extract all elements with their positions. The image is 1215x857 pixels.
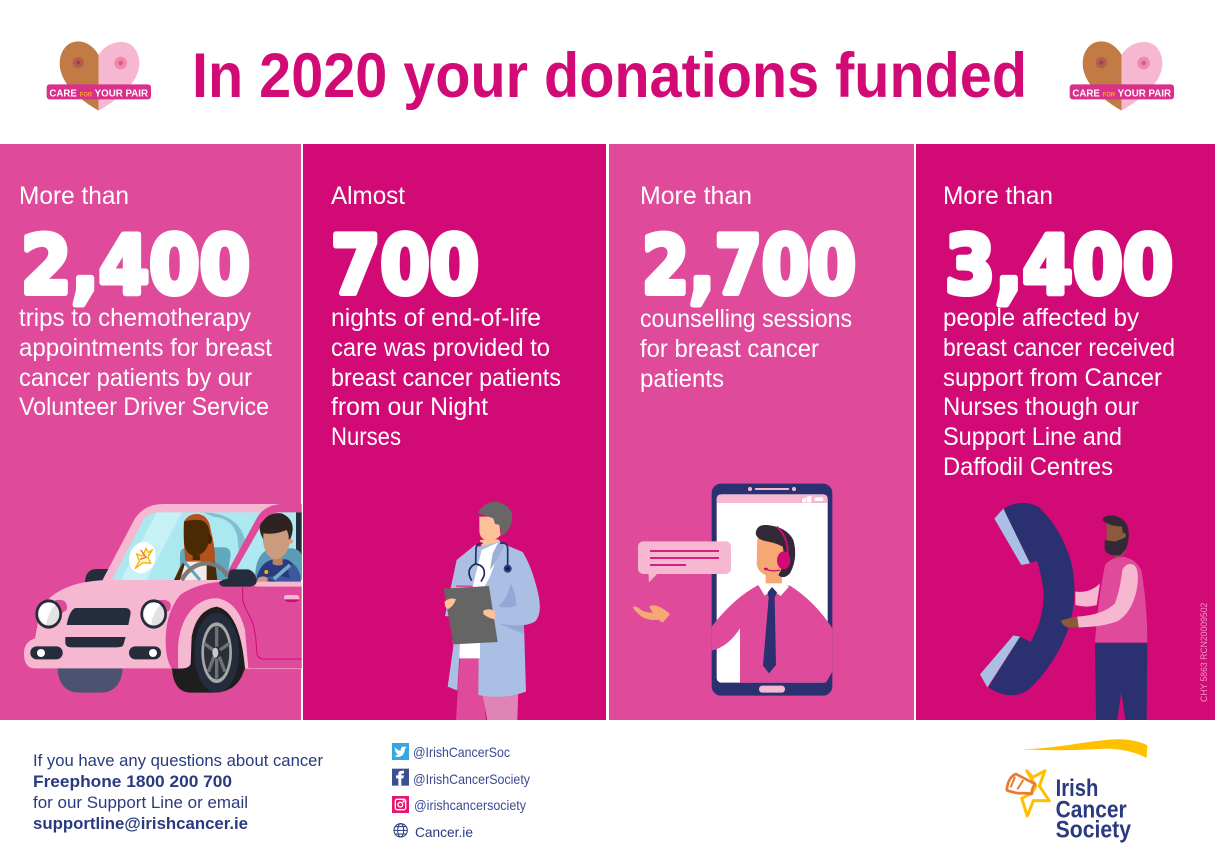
description: people affected by <box>943 304 1139 332</box>
description: Nurses though our <box>943 393 1139 421</box>
instagram handle: @irishcancersociety <box>414 797 526 813</box>
panel background <box>609 144 914 720</box>
description: trips to chemotherapy <box>19 304 251 332</box>
footer: social links <box>392 743 530 840</box>
logo: care for your pair right <box>1070 41 1174 111</box>
big number: 2,700 <box>642 219 856 312</box>
description: Support Line and <box>943 423 1122 451</box>
wordmark <box>1056 775 1132 843</box>
wordmark: Society <box>1056 816 1132 843</box>
panel background <box>303 144 606 720</box>
footer: contact text: If you have any questions about cancer <box>33 751 323 770</box>
illustration: man holding giant phone handset <box>980 503 1209 720</box>
footer: contact text: Freephone 1800 200 700 <box>33 772 232 791</box>
intro text: Almost <box>331 182 405 210</box>
description: cancer patients by our <box>19 364 252 392</box>
title: In 2020 your donations funded <box>192 41 1027 111</box>
logo: care for your pair right: CARE FOR YOUR PAIR <box>1072 88 1171 99</box>
logo: irish cancer society <box>1007 739 1147 843</box>
illustration: pink car with driver <box>24 504 302 693</box>
big number: 700 <box>331 219 479 312</box>
logo: care for your pair left <box>47 41 151 111</box>
description: breast cancer received <box>943 334 1175 362</box>
panel: night nurses <box>303 144 606 720</box>
description <box>640 305 852 393</box>
description: breast cancer patients <box>331 364 561 392</box>
reference code: CHY 5863 RCN20009502 <box>1199 603 1209 702</box>
description: patients <box>640 365 724 393</box>
description <box>331 304 561 451</box>
swoosh <box>1022 739 1147 758</box>
description: support from Cancer <box>943 364 1162 392</box>
twitter handle: @IrishCancerSoc <box>413 744 510 760</box>
description: Daffodil Centres <box>943 453 1113 481</box>
icon: facebook <box>392 769 409 786</box>
description: Nurses <box>331 423 401 451</box>
description: for breast cancer <box>640 335 819 363</box>
panel: support line and daffodil centres <box>916 144 1215 720</box>
logo: care for your pair left: CARE FOR YOUR PAIR <box>49 88 148 99</box>
icon: instagram <box>392 796 409 813</box>
intro text: More than <box>640 182 752 210</box>
footer: contact text: supportline@irishcancer.ie <box>33 814 248 833</box>
panel background <box>916 144 1215 720</box>
illustration: nurse with clipboard <box>444 502 540 720</box>
website: Cancer.ie <box>415 824 473 840</box>
description: care was provided to <box>331 334 550 362</box>
panel: volunteer driver trips <box>0 144 302 720</box>
footer: contact text <box>33 751 323 833</box>
icon: twitter <box>392 743 409 760</box>
intro text: More than <box>943 182 1053 210</box>
daffodil <box>1007 771 1049 816</box>
intro text: More than <box>19 182 129 210</box>
description: from our Night <box>331 393 488 421</box>
panel: counselling sessions <box>609 144 914 720</box>
big number: 2,400 <box>21 219 250 312</box>
footer: contact text: for our Support Line or email <box>33 793 248 812</box>
description: nights of end-of-life <box>331 304 541 332</box>
big number: 3,400 <box>945 219 1173 312</box>
description: counselling sessions <box>640 305 852 333</box>
description: appointments for breast <box>19 334 272 362</box>
description <box>19 304 272 421</box>
wordmark: Irish <box>1056 775 1098 802</box>
illustration: smartphone counsellor <box>633 484 832 696</box>
panel background <box>0 144 301 720</box>
icon: globe <box>394 824 407 837</box>
description: Volunteer Driver Service <box>19 393 269 421</box>
wordmark: Cancer <box>1056 796 1127 823</box>
description <box>943 304 1175 481</box>
facebook handle: @IrishCancerSociety <box>413 771 530 787</box>
